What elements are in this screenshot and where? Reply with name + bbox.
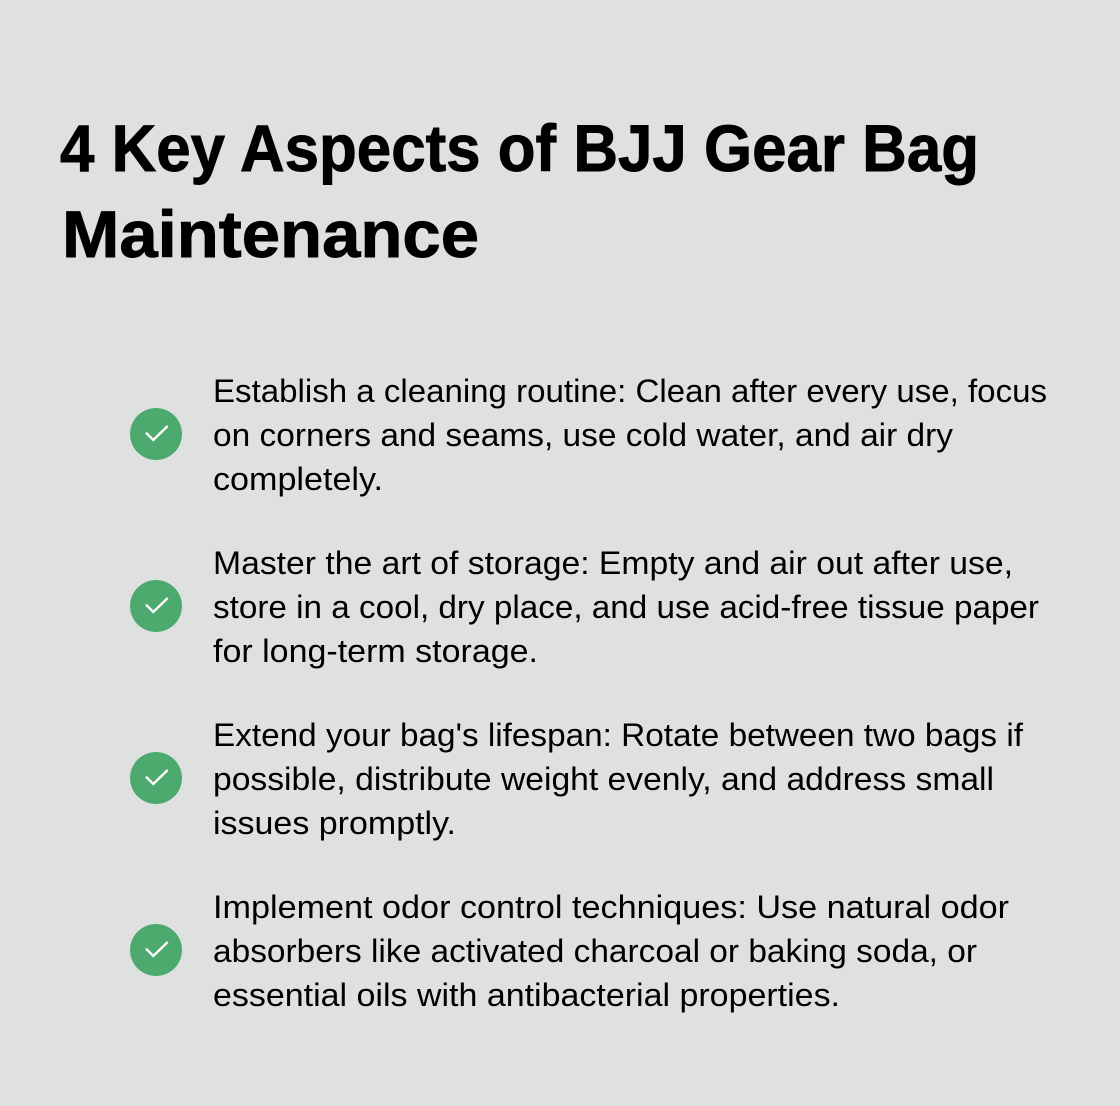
- title: [60, 111, 979, 271]
- text block: lifespan: possible, distribute weight evenly, and address small: [213, 761, 994, 797]
- text block: storage: for long-term storage.: [213, 633, 538, 669]
- item 2: storage: [130, 545, 1039, 669]
- text block: lifespan: Extend your bag's lifespan: Rotate between two bags if: [213, 717, 1024, 753]
- icon: green check circle 1: [130, 408, 182, 460]
- text block: lifespan: issues promptly.: [213, 805, 456, 841]
- text block: storage: Master the art of storage: Empty and air out after use,: [213, 545, 1013, 581]
- icon: green check circle 3: [130, 752, 182, 804]
- text block: cleaning routine: on corners and seams, use cold water, and air dry: [213, 417, 954, 453]
- item 4: odor control: [130, 889, 1009, 1013]
- text block: lifespan: [213, 717, 1024, 841]
- text block: odor control: Implement odor control techniques: Use natural odor: [213, 889, 1009, 925]
- title: 4 Key Aspects of BJJ Gear Bag: [60, 111, 979, 185]
- item 1: cleaning routine: [130, 373, 1047, 497]
- title: Maintenance: [62, 197, 479, 271]
- item 3: lifespan: [130, 717, 1024, 841]
- text block: storage: store in a cool, dry place, and use acid-free tissue paper: [213, 589, 1039, 625]
- text block: odor control: absorbers like activated charcoal or baking soda, or: [213, 933, 977, 969]
- text block: odor control: [213, 889, 1009, 1013]
- icon: green check circle 4: [130, 924, 182, 976]
- text block: storage: [213, 545, 1039, 669]
- text block: cleaning routine: completely.: [213, 461, 383, 497]
- text block: odor control: essential oils with antibacterial properties.: [213, 977, 840, 1013]
- text block: cleaning routine: [213, 373, 1047, 497]
- icon: green check circle 2: [130, 580, 182, 632]
- text block: cleaning routine: Establish a cleaning routine: Clean after every use, focus: [213, 373, 1047, 409]
